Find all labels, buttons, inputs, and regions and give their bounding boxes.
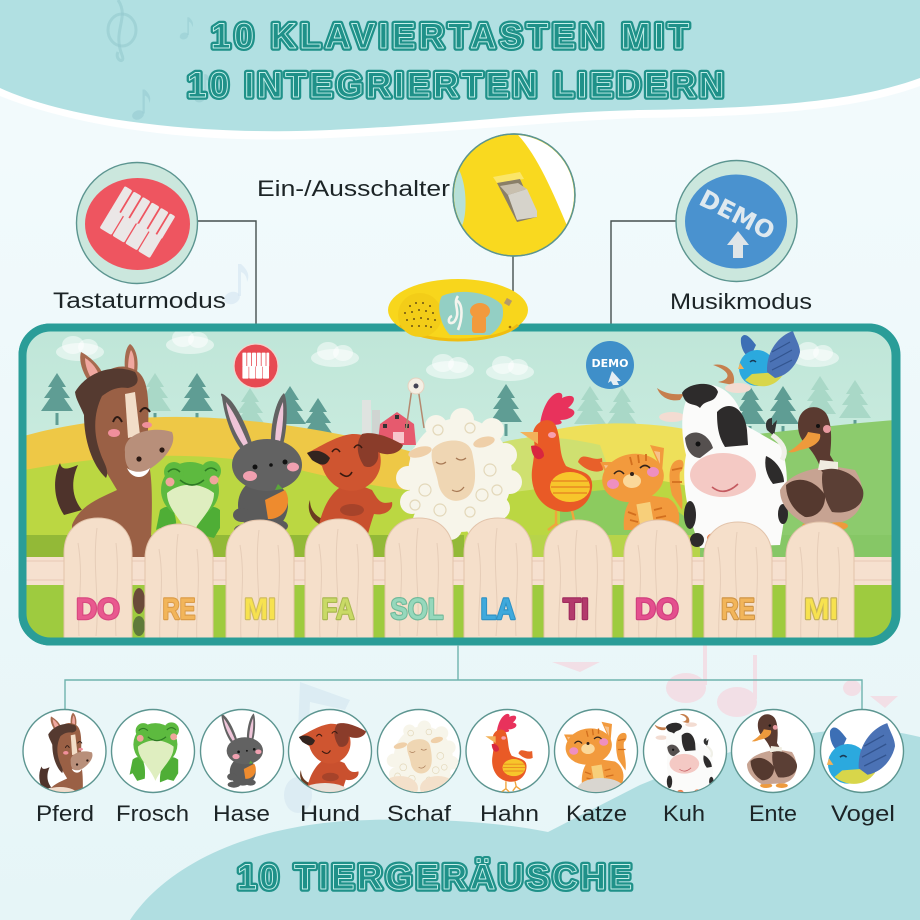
animal name labels: Hund [300,801,360,826]
key labels: DO [76,593,120,626]
sound module: yellow button [388,279,528,341]
panel: piano mat [22,327,897,644]
mat button: keyboard mode [234,344,278,388]
connector: music mode [611,221,676,345]
title: 10 Klaviertasten mit 10 integrierten Liedern [187,17,724,105]
icon: Kuh [644,710,726,797]
callout: Musikmodus icon [676,160,797,282]
animals [55,331,863,557]
key labels: RE [721,593,755,626]
mat button: demo: DEMO [592,357,628,370]
callout: power switch detail [452,133,576,257]
icon: Hase [200,710,284,792]
icon: Ente [732,710,814,792]
icon: Hahn [466,710,549,792]
animal name labels [36,801,895,826]
animal name labels: Schaf [387,801,452,826]
animal name labels: Hahn [480,801,539,826]
connector: animal row bracket [65,645,862,709]
mat button: demo [586,341,634,389]
picket fence keys [64,518,854,644]
key labels: RE [162,593,196,626]
key labels: LA [480,593,516,626]
key labels: SOL [390,593,444,626]
callout: Tastaturmodus icon [76,162,198,284]
animal name labels: Frosch [116,801,189,826]
bottom teal wave [130,729,920,920]
animal name labels: Ente [749,801,797,826]
clouds [56,329,839,381]
icon: Frosch [112,710,194,792]
animal name labels: Kuh [663,801,705,826]
connector: keyboard mode [198,221,256,346]
icon: Katze [554,710,638,802]
top teal wave [0,0,920,140]
icon: Schaf [378,710,460,800]
key labels: TI [563,593,589,626]
key labels: FA [322,593,354,626]
icon: Vogel [820,710,904,792]
key labels: MI [804,593,838,626]
animal name labels: Katze [566,801,627,826]
decorative music notes [108,0,898,813]
bottom title: 10 Tiergeräusche: 10 TIERGERÄUSCHE [237,858,632,897]
key labels: DO [635,593,679,626]
bottom title: 10 Tiergeräusche: 10 TIERGERÄUSCHE [237,858,632,897]
animal name labels: Vogel [831,801,895,826]
key labels: MI [244,593,276,626]
animal name labels: Hase [213,801,270,826]
key labels [76,597,838,620]
trees [41,373,871,436]
icon: Pferd [22,708,107,794]
label: Tastaturmodus: Tastaturmodus [53,288,226,313]
connector: power switch [512,256,514,303]
title: 10 Klaviertasten mit 10 integrierten Liedern: 10 KLAVIERTASTEN MIT [211,17,689,56]
animal name labels: Pferd [36,801,94,826]
title: 10 Klaviertasten mit 10 integrierten Liedern: 10 KLAVIERTASTEN MIT [211,17,689,56]
title: 10 Klaviertasten mit 10 integrierten Liedern: 10 INTEGRIERTEN LIEDERN [187,66,724,105]
farm hills [24,417,895,640]
title: 10 Klaviertasten mit 10 integrierten Liedern: 10 INTEGRIERTEN LIEDERN [187,66,724,105]
label: Ein-/Ausschalter: Ein-/Ausschalter [257,176,450,201]
callout: Musikmodus icon: DEMO [695,184,779,246]
barn and silos [362,378,424,445]
label: Musikmodus: Musikmodus [670,289,812,314]
icon: Hund [288,710,372,803]
